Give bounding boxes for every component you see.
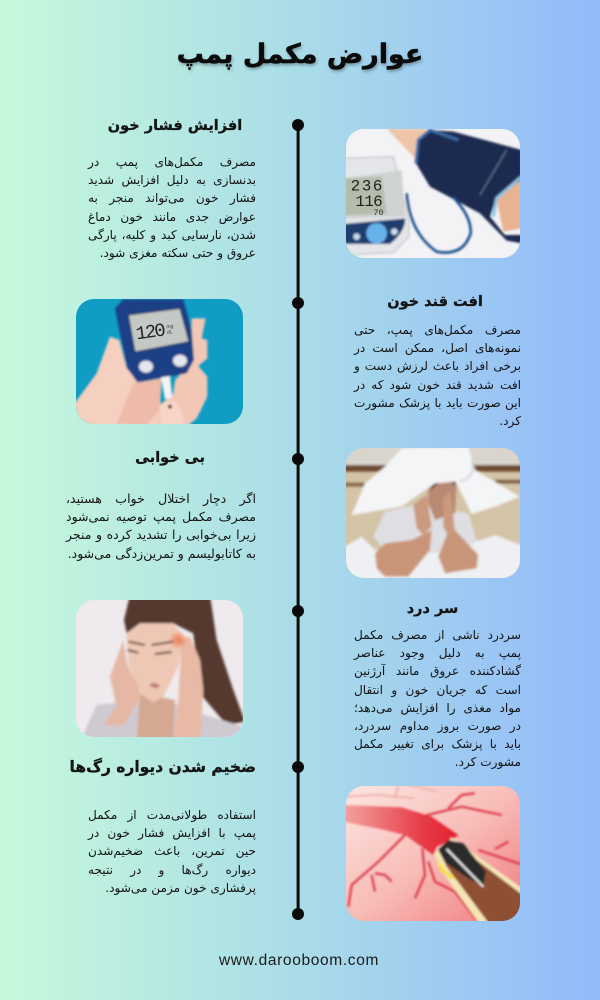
- text: headache: در صورت بروز مداوم سردرد،: [354, 719, 521, 733]
- image: glucose meter: [76, 299, 243, 424]
- text: blood sugar drop: کرد.: [499, 414, 521, 428]
- text: blood sugar drop: [354, 323, 521, 428]
- text: blood sugar drop: برخی افراد باعث لرزش دست و: [354, 359, 521, 373]
- text: insomnia: [66, 491, 256, 562]
- text: high blood pressure: فشار خون می‌تواند منجر به: [88, 191, 256, 205]
- heading: headache: سر درد: [407, 601, 458, 617]
- text: blood sugar drop: این صورت باید با پزشک مشورت: [354, 396, 521, 410]
- text: thickened artery walls: [88, 808, 256, 895]
- title: عوارض مکمل پمپ: [177, 39, 423, 70]
- text: high blood pressure: مصرف مکمل‌های پمپ در: [88, 155, 256, 169]
- text: high blood pressure: عوارض جدی مانند خون دماغ: [88, 210, 256, 224]
- image: woman with headache: [76, 600, 243, 737]
- text: headache: پمپ به دلیل وجود عناصر: [354, 646, 521, 660]
- heading: high blood pressure: افزایش فشار خون: [108, 118, 242, 134]
- text: insomnia: اگر دچار اختلال خواب هستید،: [66, 491, 256, 506]
- text: thickened artery walls: پرفشاری خون مزمن می‌شود.: [105, 881, 256, 895]
- image: man under pillow: [346, 448, 520, 578]
- text: thickened artery walls: استفاده طولانی‌مدت از مکمل: [88, 808, 256, 822]
- text: insomnia: زیرا بی‌خوابی را تشدید کرده و منجر: [66, 527, 256, 542]
- text: headache: سردرد ناشی از مصرف مکمل: [354, 628, 521, 642]
- text: high blood pressure: بدنسازی به دلیل افزایش شدید: [88, 173, 256, 187]
- image: glucose meter: dL: [167, 329, 173, 336]
- image: glucose meter: 120: [134, 319, 167, 345]
- text: headache: است که جریان خون و انتقال: [354, 683, 521, 697]
- image: glucose meter: mg: [166, 323, 174, 330]
- text: blood sugar drop: نمونه‌های اصل، ممکن است در: [354, 341, 521, 355]
- heading: thickened artery walls: ضخیم شدن دیواره رگ‌ها: [70, 758, 256, 776]
- text: high blood pressure: شدن، نارسایی کبد و کلیه، پارگی: [88, 228, 256, 242]
- text: thickened artery walls: حین تمرین، باعث ضخیم‌شدن: [88, 844, 256, 858]
- text: headache: مواد مغذی را افزایش می‌دهد؛: [354, 701, 521, 715]
- text: headache: باید با پزشک برای تغییر مکمل: [354, 737, 521, 751]
- image: blood pressure monitor: 236: [351, 178, 382, 196]
- heading: blood sugar drop: افت قند خون: [387, 294, 483, 310]
- image: blood pressure monitor: [346, 129, 520, 258]
- text: headache: مشورت کرد.: [455, 755, 521, 769]
- text: insomnia: به کاتابولیسم و تمرین‌زدگی می‌شود.: [68, 546, 256, 561]
- text: blood sugar drop: مصرف مکمل‌های پمپ، حتی: [354, 323, 521, 337]
- text: headache: [354, 628, 521, 769]
- heading: insomnia: بی خوابی: [135, 450, 205, 466]
- image: artery with stent: [346, 786, 520, 921]
- text: insomnia: مصرف مکمل پمپ توصیه نمی‌شود: [66, 509, 256, 524]
- text: thickened artery walls: دیواره رگ‌ها و در نتیجه: [88, 863, 256, 877]
- text: headache: گشادکننده عروق مانند آرژنین: [354, 664, 521, 678]
- text: high blood pressure: عروق و حتی سکته مغزی شود.: [100, 246, 256, 260]
- website: www.darooboom.com: [219, 952, 379, 969]
- timeline: [292, 119, 304, 920]
- text: thickened artery walls: پمپ با افزایش فشار خون در: [88, 826, 256, 840]
- image: blood pressure monitor: 116: [355, 193, 383, 211]
- image: blood pressure monitor: 70: [373, 208, 384, 218]
- text: blood sugar drop: افت شدید قند خون شود که در: [354, 378, 521, 392]
- text: high blood pressure: [88, 155, 256, 260]
